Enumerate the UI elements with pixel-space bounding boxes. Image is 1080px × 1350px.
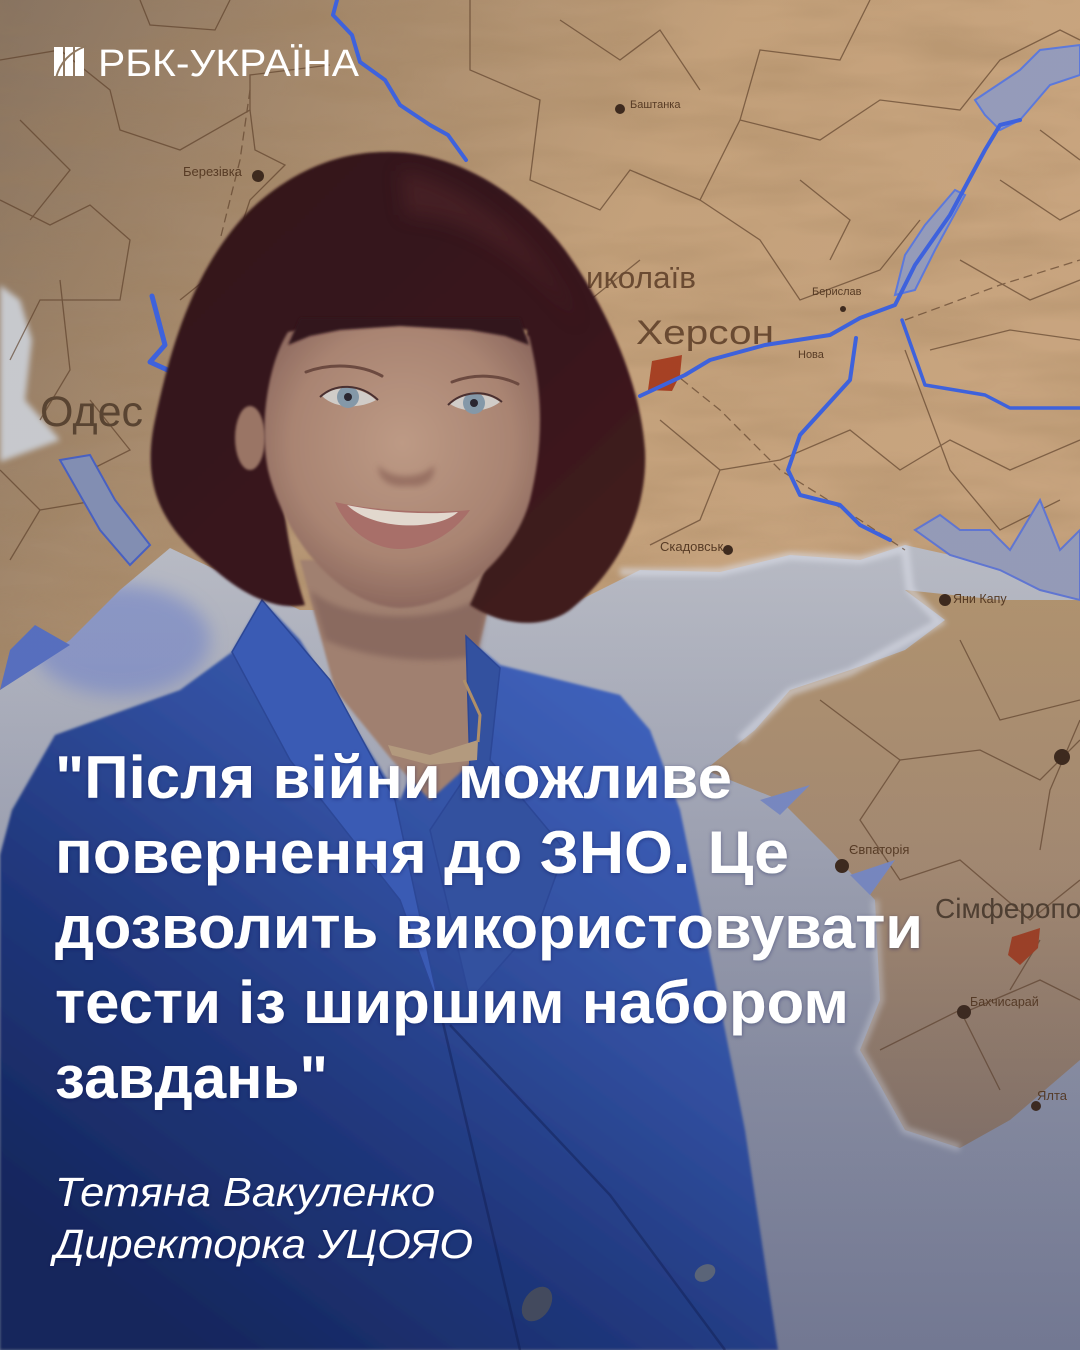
map: western coast water [0, 625, 70, 690]
portrait: ear [235, 406, 265, 470]
logo wordmark: РБК-УКРАЇНА [98, 43, 360, 85]
canal: Kakhovka [788, 338, 890, 540]
heading: quote: "Після війни можливе [55, 744, 732, 811]
portrait: hair highlight [400, 170, 580, 330]
portrait: left lapel [232, 600, 440, 1010]
map: settlement dots [252, 104, 1070, 1111]
map: Crimea peninsula [705, 590, 1080, 1148]
label: Бахчисарай: Бахчисарай [970, 995, 1039, 1009]
portrait: left eye [320, 386, 378, 408]
map: blue glow on left sea [30, 585, 210, 695]
portrait: Tetiana Vakulenko [0, 152, 778, 1350]
heading: quote: тести із ширшим набором [55, 969, 849, 1036]
portrait: jacket lower seam [440, 1010, 725, 1350]
portrait: jacket [0, 600, 778, 1350]
map: glow along coast [620, 548, 940, 740]
logo icon [54, 46, 86, 78]
river: Southern Bug [333, 0, 466, 160]
author role: Директорка УЦОЯО [50, 1221, 473, 1267]
map: north-west Crimean inlet [760, 785, 895, 895]
label: Євпаторія: Євпаторія [849, 842, 909, 857]
portrait: jacket button [515, 1281, 559, 1327]
label: Херсон: Херсон [636, 314, 774, 352]
portrait: necklace [388, 740, 478, 765]
map: glow along western Crimea [860, 900, 960, 1148]
heading: quote [55, 744, 923, 1111]
portrait: fringe edge [288, 318, 529, 345]
map: left white glare patch [0, 285, 60, 462]
portrait: right eye [448, 392, 502, 414]
label: Нова Каховка: Нова [798, 349, 825, 361]
label: Баштанка: Баштанка [630, 99, 681, 111]
label: Ялта: Ялта [1037, 1088, 1068, 1103]
map: Kakhovka reservoir [895, 45, 1080, 295]
portrait: left eyebrow [306, 366, 382, 376]
portrait: hair [151, 152, 645, 623]
logo: РБК-Україна [54, 43, 360, 85]
label: Березівка: Березівка [183, 164, 243, 179]
author name: Тетяна Вакуленко [55, 1169, 435, 1215]
river: left estuary [150, 296, 172, 372]
map: Dniester estuary [60, 455, 150, 565]
label: Берислав: Берислав [812, 286, 862, 298]
heading: quote: дозволить використовувати [55, 894, 923, 961]
river: Dnipro [640, 120, 1020, 396]
heading: quote: повернення до ЗНО. Це [55, 819, 789, 886]
portrait: mouth [335, 502, 470, 549]
map: wood grain texture [580, 28, 1080, 588]
map: Kherson red district [648, 355, 682, 391]
label: Миколаїв: иколаїв [586, 260, 696, 295]
map: Syvash water [915, 500, 1080, 600]
portrait: chin shadow on neck [310, 590, 490, 660]
map: settlement labels [40, 99, 1080, 1103]
portrait: right lapel [430, 636, 565, 1000]
portrait: face [264, 323, 540, 608]
portrait: neck and chest [300, 560, 500, 800]
heading: quote: завдань" [55, 1044, 328, 1111]
canal: North Crimean [902, 320, 1080, 408]
map: mainland wood panel [0, 0, 1080, 690]
author name and role [50, 1169, 473, 1267]
portrait: necklace cord [464, 680, 480, 742]
portrait: right eyebrow [452, 376, 518, 384]
label: Скадовськ: Скадовськ [660, 539, 723, 554]
map: Simferopol red district [1008, 928, 1040, 965]
label: Яни Капу: Яни Капу [953, 592, 1007, 606]
label: Одеса: Одес [40, 388, 143, 436]
portrait: jacket button small [691, 1261, 719, 1285]
portrait: nose shadow [378, 465, 434, 486]
map: blue rivers and canals [150, 0, 1080, 540]
